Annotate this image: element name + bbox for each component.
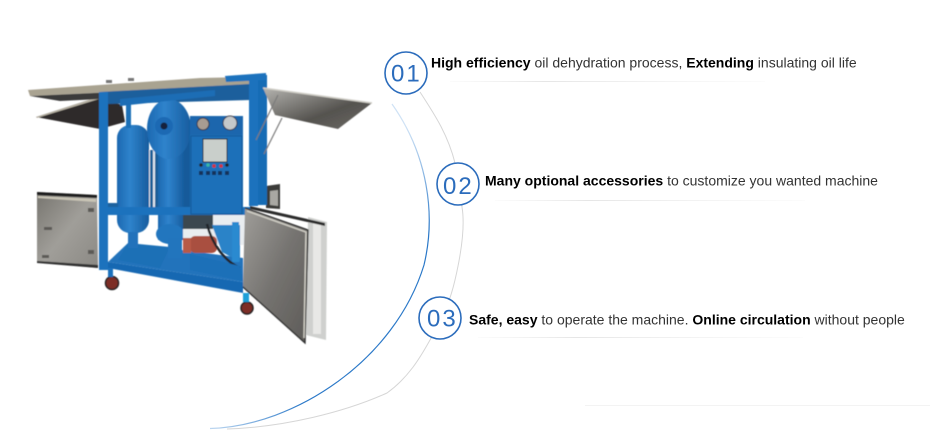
badge 02	[437, 163, 479, 205]
badge 03: 03	[427, 306, 458, 332]
pump and hose area	[183, 215, 245, 281]
dark backing between tank and cabinet	[182, 128, 191, 208]
feature 01	[385, 52, 857, 94]
feature 03	[419, 297, 905, 339]
touch screen	[203, 139, 227, 162]
top roof panel	[28, 77, 262, 104]
text 01: High efficiency oil dehydration process, Extending insulating oil life	[431, 54, 857, 70]
base platform	[108, 243, 243, 293]
main vacuum tank with flange	[147, 99, 191, 258]
left rear lid	[36, 97, 125, 129]
front-right open door	[243, 206, 327, 343]
badge 01	[385, 52, 427, 94]
vertical tank	[117, 100, 149, 248]
inner pipes behind tanks	[148, 150, 160, 210]
text 03: Safe, easy to operate the machine. Online circulation without people	[469, 312, 905, 328]
control cabinet	[190, 116, 243, 215]
gauges	[197, 118, 209, 130]
badge 03	[419, 297, 461, 339]
right upper lid	[256, 88, 372, 154]
rear right panels	[266, 184, 280, 209]
feature 02	[437, 163, 878, 205]
curved connector lines	[210, 92, 463, 429]
buttons	[199, 163, 229, 175]
badge 02: 02	[443, 173, 474, 200]
left door panel	[37, 192, 98, 268]
frame	[99, 73, 267, 270]
machine illustration	[28, 73, 372, 343]
badge 01: 01	[391, 61, 422, 88]
text 02: Many optional accessories to customize you wanted machine	[485, 172, 878, 188]
casters	[106, 268, 253, 314]
